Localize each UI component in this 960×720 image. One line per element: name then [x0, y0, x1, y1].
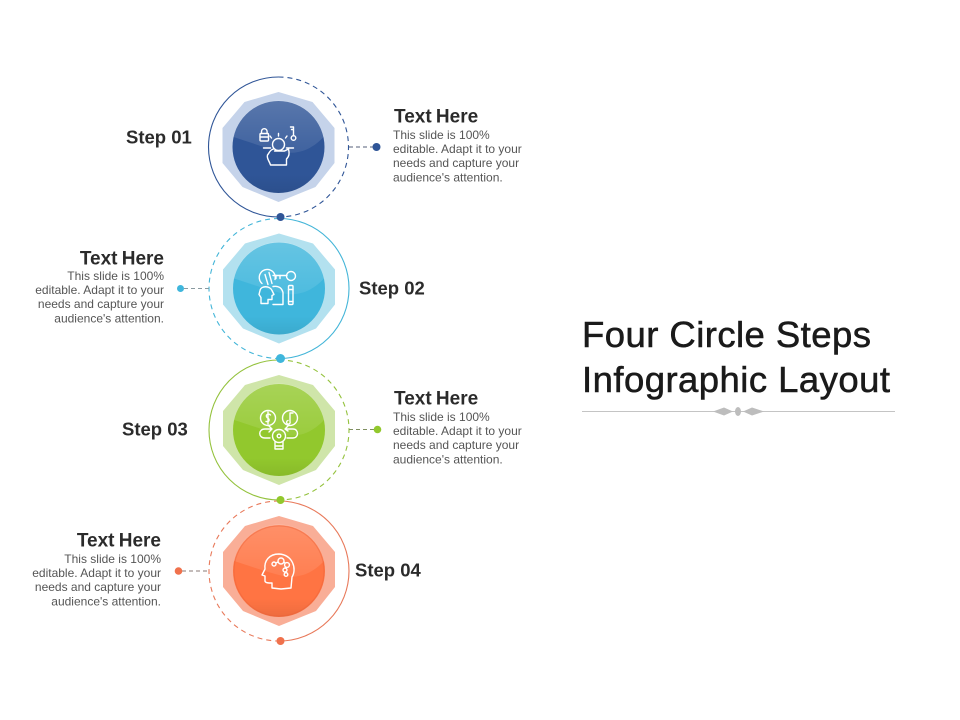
callout connector: step 4 — [175, 567, 209, 575]
connector dots on rings — [276, 213, 285, 645]
title divider ornament — [582, 407, 895, 416]
text block: step 1 — [393, 106, 522, 184]
panel: step 1 circle — [208, 77, 348, 217]
outer ring: step 1 — [208, 77, 348, 217]
text block: step 4: Text Here — [77, 530, 161, 552]
text block: step 1: editable. Adapt it to your — [393, 142, 522, 156]
text block: step 3: editable. Adapt it to your — [393, 424, 522, 438]
text block: step 2: audience's attention. — [54, 312, 164, 326]
text block: step 2: editable. Adapt it to your — [35, 283, 164, 297]
text block: step 3: needs and capture your — [393, 438, 519, 452]
octagon: step 4 — [223, 516, 335, 626]
octagon: step 3 — [223, 375, 335, 485]
text block: step 2: needs and capture your — [38, 297, 164, 311]
label: step 03: Step 03 — [122, 418, 188, 440]
text block: step 4: needs and capture your — [35, 580, 161, 594]
text block: step 4: editable. Adapt it to your — [32, 566, 161, 580]
label: step 02: Step 02 — [359, 278, 425, 298]
icon: lock, key and head — [260, 127, 296, 165]
icon: heads, key and pencil — [259, 269, 296, 304]
panel: step 4 circle — [209, 501, 349, 641]
callout connector: step 1 — [349, 143, 380, 151]
octagon: step 2 — [223, 234, 335, 344]
text block: step 3 — [393, 388, 522, 466]
text block: step 3: This slide is 100% — [393, 410, 490, 424]
text block: step 3: audience's attention. — [393, 452, 503, 466]
sphere: step 4 — [233, 525, 325, 617]
text block: step 4: This slide is 100% — [64, 552, 161, 566]
panel: step 2 circle — [209, 218, 349, 358]
sphere: step 3 — [233, 384, 325, 476]
panel: step 3 circle — [209, 360, 349, 500]
text block: step 1: Text Here — [394, 106, 478, 128]
text block: step 3: Text Here — [394, 388, 478, 410]
text block: step 2 — [35, 248, 164, 326]
outer ring: step 4 — [209, 501, 349, 641]
title: Infographic Layout — [582, 359, 890, 400]
sphere: step 2 — [233, 242, 325, 334]
icon: money, music and bulb — [260, 410, 298, 449]
octagon: step 1 — [222, 92, 334, 202]
outer ring: step 3 — [209, 360, 349, 500]
text block: step 1: audience's attention. — [393, 170, 503, 184]
title — [582, 314, 890, 400]
title: Four Circle Steps — [582, 314, 871, 355]
label: step 01: Step 01 — [126, 126, 192, 148]
outer ring: step 2 — [209, 218, 349, 358]
callout connector: step 2 — [177, 285, 209, 292]
icon: head with network — [262, 554, 294, 589]
sphere: step 1 — [232, 101, 324, 193]
text block: step 4 — [32, 530, 161, 608]
text block: step 1: This slide is 100% — [393, 128, 490, 142]
text block: step 2: Text Here — [80, 248, 164, 270]
callout connector: step 3 — [349, 426, 381, 433]
text block: step 2: This slide is 100% — [67, 269, 164, 283]
text block: step 1: needs and capture your — [393, 156, 519, 170]
text block: step 4: audience's attention. — [51, 594, 161, 608]
label: step 04: Step 04 — [355, 560, 422, 580]
